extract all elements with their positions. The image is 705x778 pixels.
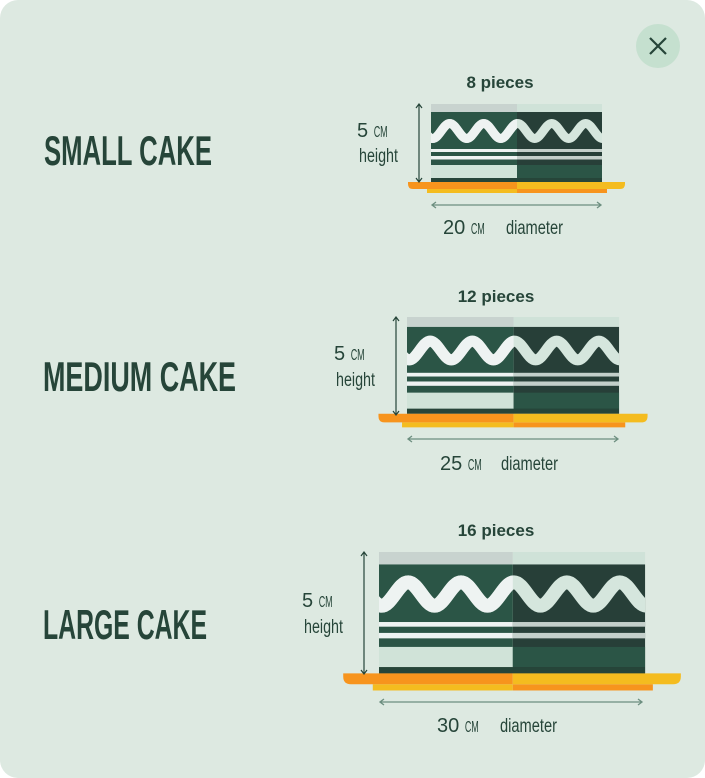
illustration: medium cake: 12 pieces [458,287,534,306]
illustration: medium cake [334,287,648,475]
illustration: small cake [357,73,625,239]
illustration: small cake: 8 pieces [466,73,534,92]
illustration: large cake: 30 CM [437,715,479,737]
heading: large cake: LARGE CAKE [43,601,207,648]
illustration: medium cake: height [336,370,376,391]
icon: close button [636,24,680,68]
illustration: small cake: diameter [506,218,564,239]
illustration: small cake: 5 CM [357,120,388,142]
illustration: large cake: 16 pieces [458,521,534,540]
illustration: small cake: 20 CM [443,217,485,239]
illustration: medium cake: 5 CM [334,343,365,365]
illustration: medium cake: diameter [501,454,559,475]
heading: medium cake: MEDIUM CAKE [43,353,236,400]
illustration: medium cake: 25 CM [440,453,482,475]
illustration: large cake: diameter [500,716,558,737]
illustration: large cake: height [304,617,344,638]
illustration: large cake: 5 CM [302,590,333,612]
illustration: small cake: height [359,146,399,167]
illustration: large cake [302,521,681,737]
heading: small cake: SMALL CAKE [44,127,212,174]
